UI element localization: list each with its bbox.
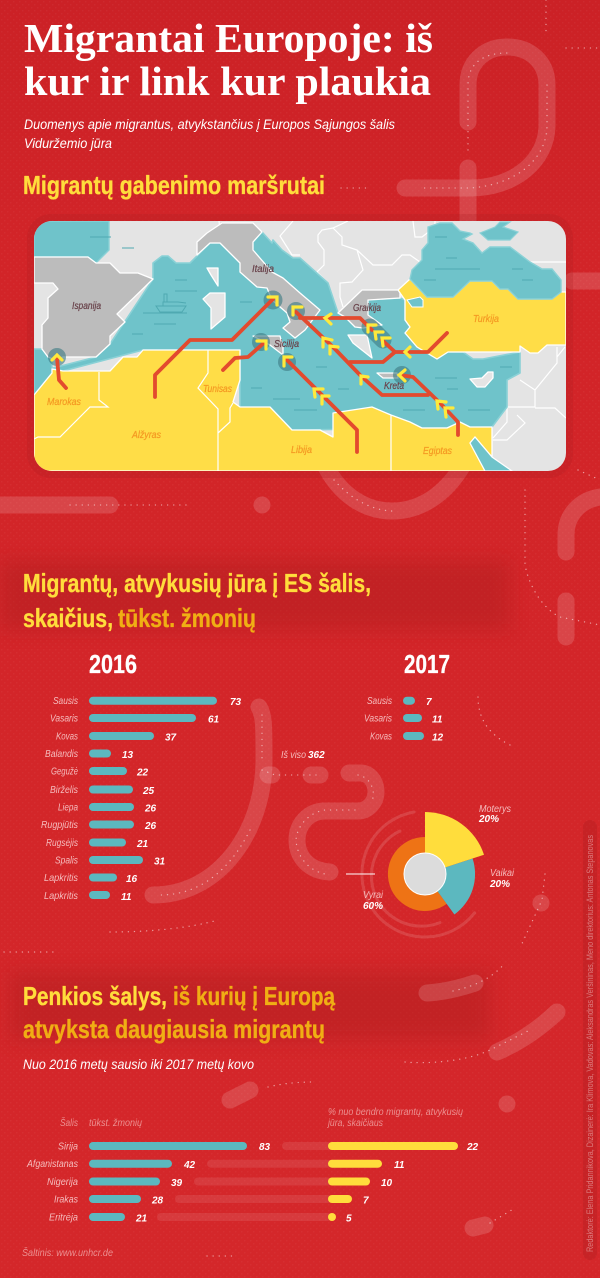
bar chart: 2016 monthly arrivals bbox=[41, 696, 242, 903]
title: Migrantai Europoje: iš bbox=[24, 15, 433, 61]
title: kur ir link kur plaukia bbox=[24, 58, 431, 104]
bar chart: 2016 monthly arrivals: Kovas bbox=[56, 732, 78, 742]
total callout: 362 bbox=[308, 750, 325, 761]
year label 2017: 2017 bbox=[404, 649, 450, 679]
pie chart: gender split bbox=[346, 804, 515, 937]
bar chart: 2017 monthly arrivals: 7 bbox=[426, 697, 432, 708]
bar chart: 2016 monthly arrivals: Spalis bbox=[55, 856, 78, 866]
pie chart: gender split: 20% bbox=[478, 814, 499, 825]
bar chart: 2016 monthly arrivals: Balandis bbox=[45, 749, 78, 760]
pie chart: gender split: Moterys bbox=[479, 804, 511, 815]
bar chart: 2016 monthly arrivals: Liepa bbox=[58, 802, 78, 814]
bar chart: five countries: Nigerija bbox=[47, 1177, 78, 1188]
route arrows bbox=[52, 297, 453, 417]
table headers: jūra, skaičiaus bbox=[326, 1118, 383, 1129]
bar chart: 2016 monthly arrivals: Lapkritis bbox=[44, 891, 78, 902]
country labels: Italija bbox=[252, 264, 274, 275]
bar chart: 2017 monthly arrivals: 11 bbox=[432, 714, 443, 726]
bar chart: five countries: 21 bbox=[135, 1214, 148, 1224]
table headers: tūkst. žmonių bbox=[89, 1118, 142, 1129]
year label 2016: 2016 bbox=[89, 649, 137, 679]
source: Šaltinis: www.unhcr.de bbox=[22, 1246, 113, 1259]
subtitle: Duomenys apie migrantus, atvykstančius į Europos Sąjungos šalis bbox=[24, 116, 395, 132]
country labels: Sicilija bbox=[274, 339, 299, 350]
subtitle bbox=[24, 116, 395, 151]
country labels bbox=[47, 264, 499, 457]
bar chart: 2016 monthly arrivals: Birželis bbox=[50, 785, 78, 796]
bar chart: 2017 monthly arrivals: Kovas bbox=[370, 732, 392, 742]
bar chart: five countries: 7 bbox=[363, 1196, 369, 1206]
total callout: Iš viso bbox=[281, 750, 306, 761]
table headers: % nuo bendro migrantų, atvykusių bbox=[328, 1107, 463, 1118]
bar chart: 2016 monthly arrivals: 13 bbox=[122, 750, 134, 761]
land: spain bbox=[34, 257, 153, 360]
title bbox=[24, 15, 433, 104]
bar chart: five countries bbox=[26, 1142, 479, 1224]
icon: ship bbox=[143, 294, 187, 313]
bar chart: 2016 monthly arrivals: Sausis bbox=[53, 696, 78, 707]
sea: black sea bbox=[410, 223, 561, 299]
country labels: Egiptas bbox=[423, 446, 452, 457]
bar chart: 2016 monthly arrivals: 21 bbox=[136, 839, 149, 850]
bar chart: 2016 monthly arrivals: 26 bbox=[144, 804, 157, 814]
bar chart: 2016 monthly arrivals: Rugsėjis bbox=[46, 838, 78, 849]
bar chart: 2016 monthly arrivals: 26 bbox=[144, 821, 157, 832]
bar chart: 2016 monthly arrivals: 16 bbox=[126, 874, 138, 885]
bar chart: five countries: 42 bbox=[183, 1160, 196, 1171]
country labels: Kreta bbox=[384, 381, 404, 392]
land: crete bbox=[377, 373, 398, 378]
country labels: Libija bbox=[291, 445, 312, 456]
bar chart: 2016 monthly arrivals: Gegužė bbox=[51, 766, 78, 778]
land: sicily bbox=[253, 336, 283, 355]
land: italy bbox=[197, 223, 320, 338]
sea: mediterranean bbox=[53, 232, 520, 430]
bar chart: 2016 monthly arrivals: Rugpjūtis bbox=[41, 820, 78, 831]
bar chart: five countries: 5 bbox=[346, 1214, 352, 1224]
bar chart: 2016 monthly arrivals: 22 bbox=[136, 768, 149, 778]
bar chart: 2016 monthly arrivals: 31 bbox=[154, 856, 166, 868]
land: sardinia and corsica bbox=[203, 268, 225, 329]
land: turkey bbox=[398, 279, 566, 359]
heading: arrivals: tūkst. žmonių bbox=[118, 603, 256, 633]
pie chart: gender split: Vaikai bbox=[490, 868, 515, 879]
country labels: Tunisas bbox=[203, 384, 232, 395]
table headers bbox=[60, 1107, 463, 1129]
credits: Redaktorė: Elena Pridannikova, Dizainerė: Ira Klimova, Vadovas: Aleksandras Veršininas, Meno direktorius: Antonas Stepanovas bbox=[585, 835, 595, 1252]
credits bbox=[583, 820, 597, 1260]
bar chart: five countries: 39 bbox=[171, 1178, 183, 1189]
heading: five countries: Penkios šalys, bbox=[23, 981, 167, 1011]
bar chart: 2016 monthly arrivals: 37 bbox=[165, 732, 177, 744]
bar chart: 2016 monthly arrivals: 11 bbox=[121, 892, 132, 903]
bar chart: 2017 monthly arrivals: Sausis bbox=[367, 696, 392, 707]
bar chart: five countries: 22 bbox=[466, 1142, 479, 1153]
routes bbox=[57, 299, 458, 452]
land: cyprus bbox=[470, 372, 493, 387]
country labels: Alžyras bbox=[131, 430, 161, 441]
panel: route map bbox=[27, 214, 573, 478]
bar chart: five countries: Irakas bbox=[54, 1194, 78, 1206]
bar chart: 2017 monthly arrivals: 12 bbox=[432, 732, 444, 744]
pie chart: gender split: Vyrai bbox=[363, 890, 384, 901]
country labels: Ispanija bbox=[72, 301, 101, 312]
pie chart: gender split: 60% bbox=[363, 901, 383, 912]
bar chart: five countries: Sirija bbox=[58, 1142, 78, 1152]
bar chart: 2016 monthly arrivals: Lapkritis bbox=[44, 873, 78, 884]
pie chart: gender split: 20% bbox=[489, 879, 510, 890]
bar chart: 2016 monthly arrivals: 61 bbox=[208, 714, 220, 726]
country labels: Turkija bbox=[473, 314, 499, 325]
country labels: Marokas bbox=[47, 397, 81, 408]
heading: arrivals: Migrantų, atvykusių jūra į ES šalis, bbox=[23, 568, 371, 598]
heading: five countries: iš kurių į Europą bbox=[173, 981, 335, 1011]
heading: routes: Migrantų gabenimo maršrutai bbox=[23, 170, 325, 200]
bar chart: 2016 monthly arrivals: 73 bbox=[230, 697, 242, 708]
bar chart: five countries: 10 bbox=[381, 1178, 393, 1189]
sea: atlantic bbox=[34, 221, 109, 395]
land: north africa bbox=[34, 350, 492, 471]
table headers: Šalis bbox=[60, 1116, 78, 1129]
bar chart: 2017 monthly arrivals bbox=[364, 696, 444, 744]
subtitle: Viduržemio jūra bbox=[24, 135, 112, 151]
bar chart: five countries: 11 bbox=[394, 1160, 405, 1171]
heading: arrivals: skaičius, bbox=[23, 603, 113, 633]
bar chart: five countries: Afganistanas bbox=[26, 1159, 78, 1170]
heading: arrivals bbox=[23, 568, 371, 633]
bar chart: 2016 monthly arrivals: 25 bbox=[142, 786, 155, 797]
bar chart: 2017 monthly arrivals: Vasaris bbox=[364, 714, 392, 724]
bar chart: five countries: 28 bbox=[151, 1196, 164, 1206]
heading: five countries bbox=[23, 981, 335, 1044]
land: greece bbox=[338, 290, 400, 328]
total callout bbox=[281, 750, 325, 761]
heading: five countries: atvyksta daugiausia migrantų bbox=[23, 1014, 325, 1044]
bar chart: five countries: 83 bbox=[259, 1142, 271, 1153]
period note: Nuo 2016 metų sausio iki 2017 metų kovo bbox=[23, 1056, 254, 1072]
country labels: Graikija bbox=[353, 303, 381, 314]
bar chart: 2016 monthly arrivals: Vasaris bbox=[50, 714, 78, 724]
bar chart: five countries: Eritrėja bbox=[49, 1212, 78, 1224]
sea: red sea bbox=[470, 437, 512, 471]
